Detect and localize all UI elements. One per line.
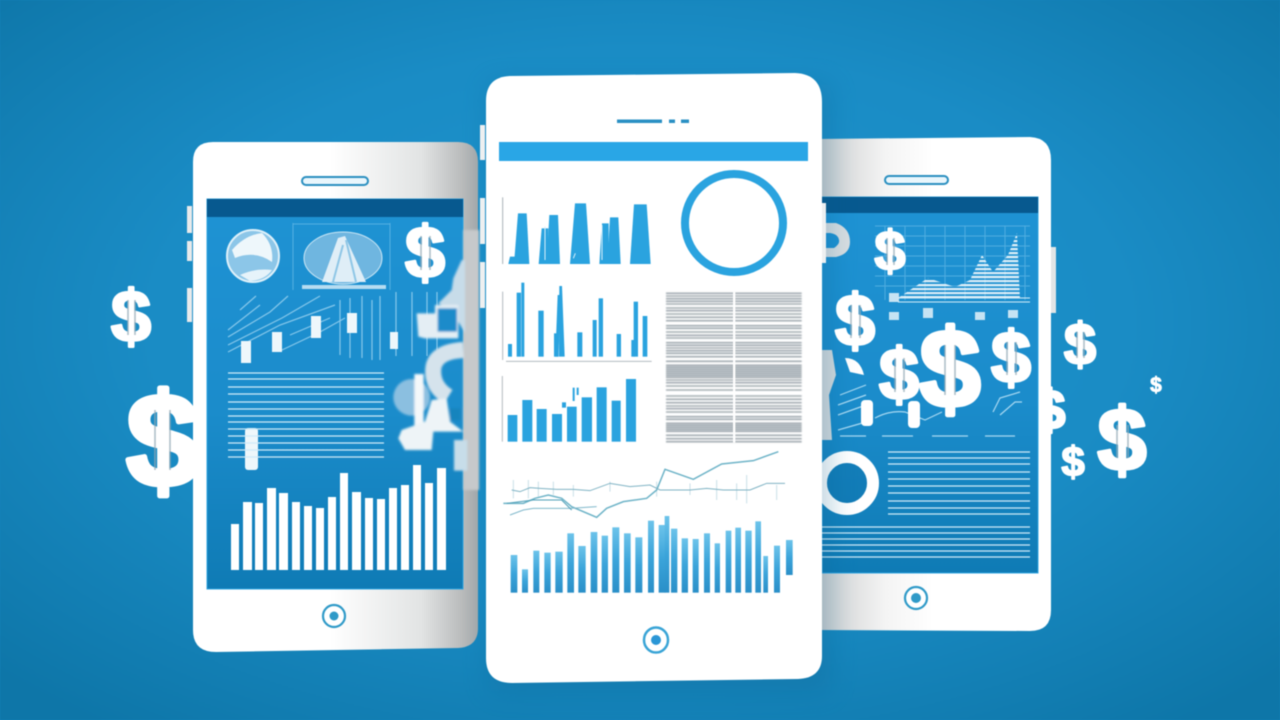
dollar sign: outside right small: $ — [1061, 438, 1085, 485]
center gradient bar chart — [511, 516, 793, 593]
dollar sign: outside right large: $ — [1098, 390, 1146, 489]
fragment: curved stroke — [433, 350, 463, 397]
left screen text lines — [228, 373, 384, 457]
right screen line sketch — [838, 385, 1022, 436]
dollar sign: left phone screen: $ — [405, 213, 445, 293]
left screen globe icon — [227, 230, 279, 282]
left phone home button — [323, 605, 345, 627]
center wide bar chart — [502, 376, 636, 442]
right screen donut — [821, 457, 873, 509]
dollar sign: right screen right: $ — [991, 318, 1031, 398]
left screen radar panel — [293, 223, 390, 290]
right screen letter ring — [822, 223, 850, 257]
left phone screen — [207, 199, 463, 589]
center phone home button — [644, 628, 668, 652]
right phone screen — [822, 197, 1038, 573]
dollar sign: outside right upper: $ — [1064, 312, 1096, 377]
fragment: window shape — [417, 305, 458, 338]
dollar sign: right screen left: $ — [835, 281, 875, 361]
center phone body — [486, 73, 822, 683]
right phone side button — [1051, 247, 1056, 313]
dollar sign: clipped at phone edge: $ — [1034, 378, 1066, 441]
center line chart — [503, 452, 785, 517]
phone: right — [815, 137, 1056, 631]
center trapezoid bar chart — [503, 197, 651, 264]
right screen area chart — [875, 226, 1030, 302]
fragment: bright column — [414, 374, 424, 450]
right phone body — [815, 137, 1051, 631]
fragment: small blue patch — [450, 408, 461, 420]
right screen text lines — [822, 452, 1030, 557]
dollar sign: left upper: $ — [111, 277, 151, 357]
fragment: disc — [393, 379, 430, 416]
fragment: light upper shape — [438, 260, 465, 333]
dollar sign: right top: $ — [874, 219, 906, 282]
left phone speaker — [302, 177, 368, 185]
center phone speaker — [617, 120, 689, 123]
center thin bar chart — [503, 283, 652, 361]
center phone side buttons — [480, 125, 826, 308]
right phone speaker — [885, 176, 948, 184]
dollar sign: right screen middle: $ — [879, 335, 919, 415]
dollar sign: outside right tiny: $ — [1150, 374, 1162, 397]
center data table — [666, 292, 802, 443]
left phone body — [193, 142, 478, 652]
left screen bar chart — [231, 465, 446, 570]
center header bar — [499, 142, 808, 161]
blurred dollar fragment between phones — [393, 230, 479, 490]
center phone shadow — [490, 85, 830, 690]
right screen markers — [889, 293, 1018, 320]
fragment: lower bright body — [398, 398, 463, 450]
right phone home button — [905, 587, 927, 609]
right screen small markers — [845, 358, 920, 428]
fragment: phone edge strip — [463, 230, 479, 490]
dollar sign: left large: $ — [126, 367, 200, 514]
center ring chart — [685, 174, 783, 272]
fragment: lower pale block — [454, 440, 467, 471]
fragment: window inner — [438, 308, 457, 332]
phone: left — [187, 142, 478, 652]
left screen markers — [241, 313, 398, 470]
phone: center — [480, 73, 826, 683]
floating dollar signs — [111, 213, 1162, 514]
right screen side figure — [822, 350, 836, 440]
dollar sign: right screen large: $ — [919, 308, 981, 431]
dollar sign inner ticks — [128, 236, 1128, 470]
left screen line sketch — [228, 292, 437, 360]
left phone side buttons — [187, 206, 192, 322]
